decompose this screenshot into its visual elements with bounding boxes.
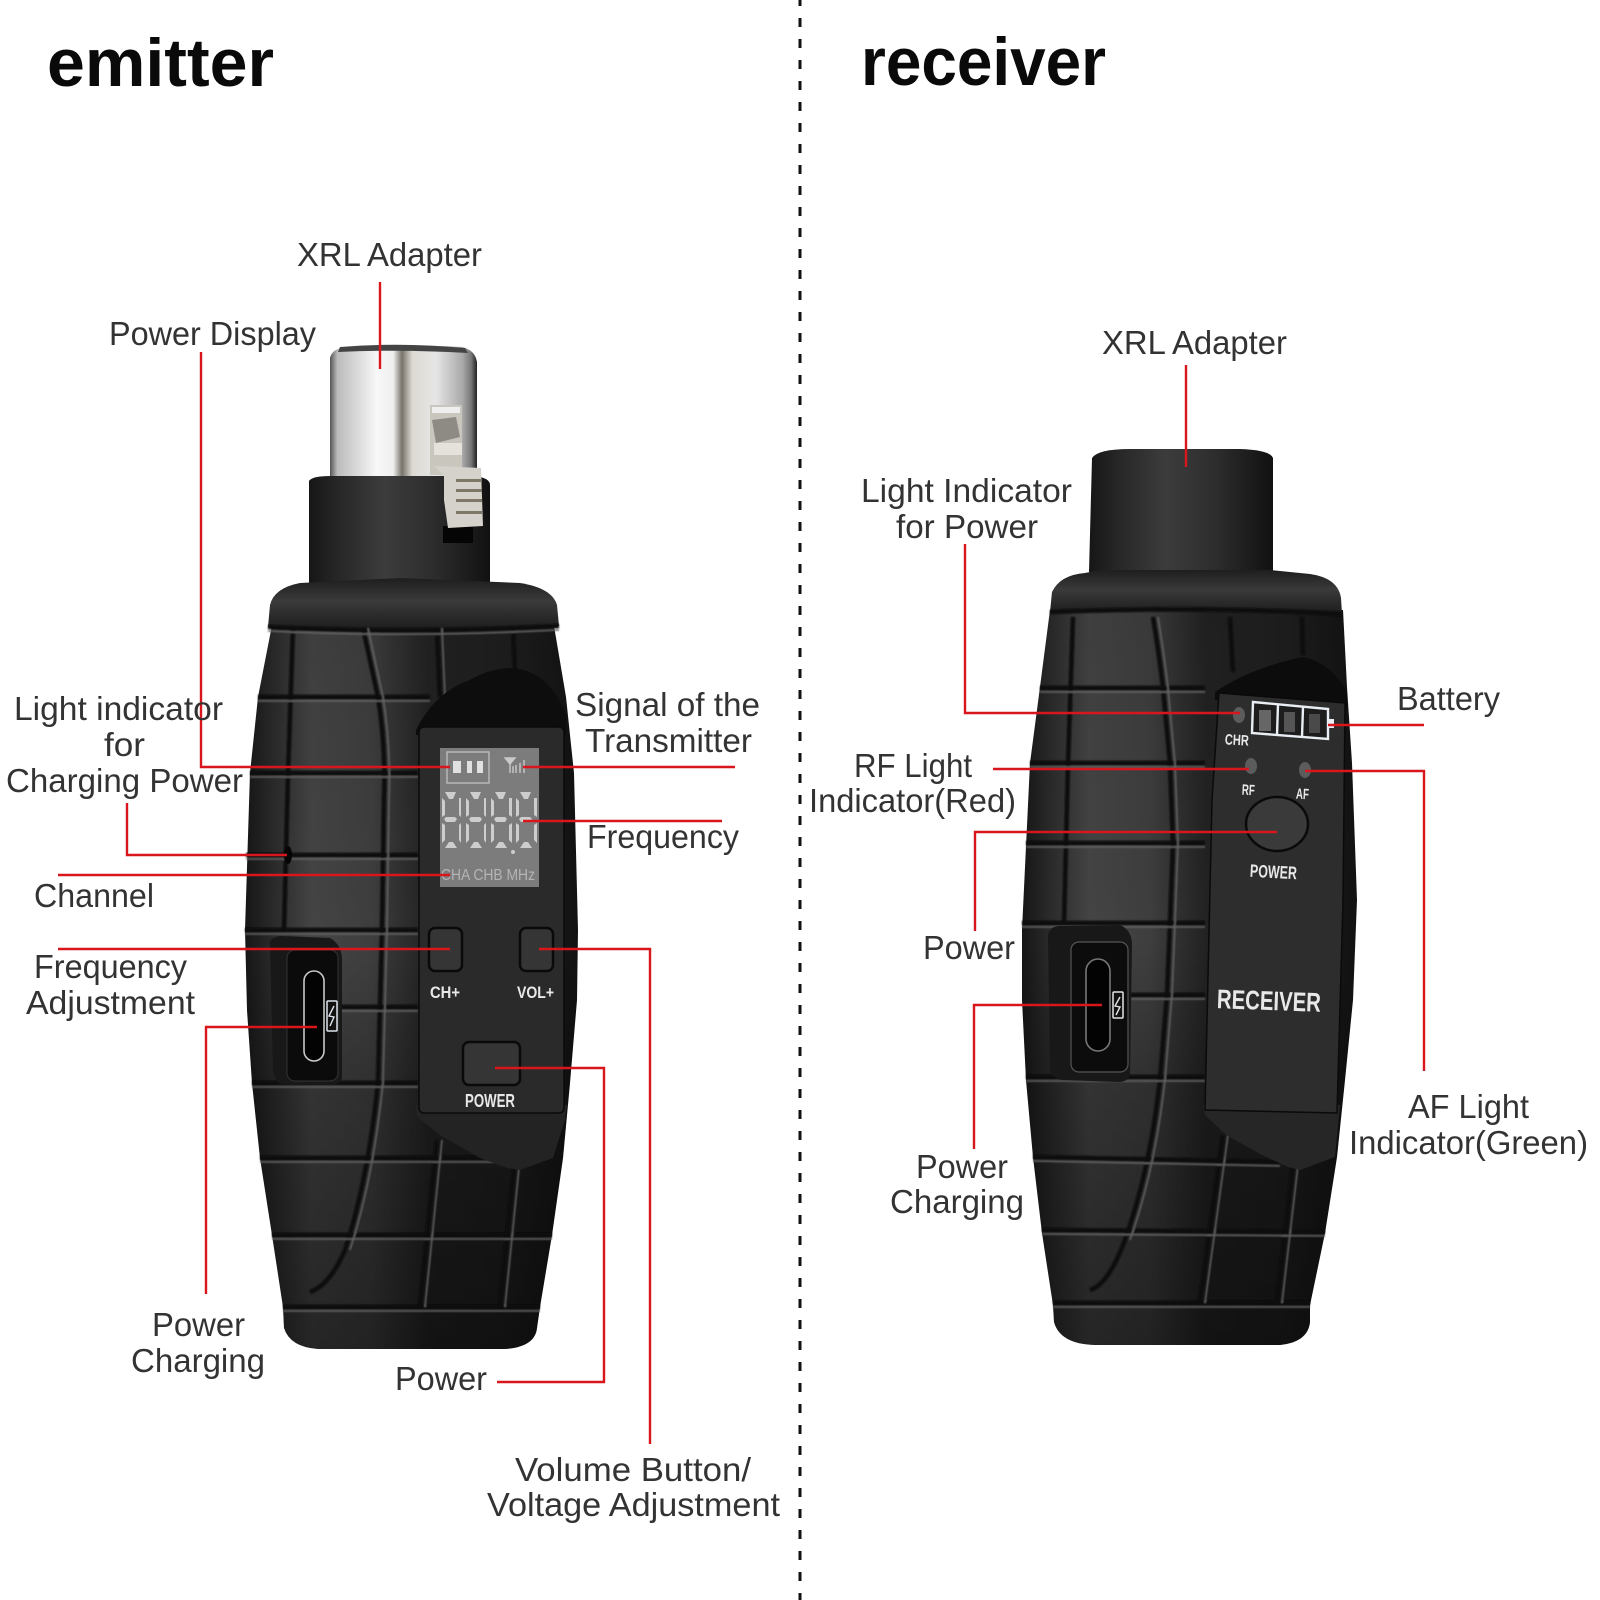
emitter callout: Frequency Adjustment: Adjustment: [26, 984, 195, 1021]
receiver callout: RF Light Indicator(Red): RF Light: [854, 747, 972, 784]
title: receiver: receiver: [861, 24, 1106, 100]
emitter callout: Signal of the Transmitter: Transmitter: [585, 722, 752, 759]
emitter callout: Light indicator for Charging Power: Light indicator: [14, 690, 223, 727]
label CHR: CHR: [1224, 731, 1249, 750]
receiver callout: XRL Adapter: XRL Adapter: [1102, 324, 1287, 361]
emitter callout: Signal of the Transmitter: [523, 686, 760, 767]
VOL+ button: [520, 928, 553, 971]
emitter callout: Power: Power: [395, 1360, 487, 1397]
receiver callout: Power: Power: [923, 929, 1015, 966]
receiver panel surround, lower: [1203, 1105, 1340, 1170]
receiver barrel: [1089, 449, 1273, 572]
battery bolt icon: [327, 1001, 337, 1031]
emitter callout: Volume Button / Voltage Adjustment: [487, 949, 780, 1523]
label AF: AF: [1295, 786, 1309, 803]
CHR LED: [1233, 707, 1245, 723]
lcd digit 3: [491, 792, 512, 848]
emitter callout: Power Charging: Charging: [131, 1342, 265, 1379]
latch slider: [434, 466, 483, 528]
lcd digit 1: [442, 792, 461, 848]
receiver callout: Light Indicator for Power: Light Indicator: [861, 472, 1072, 509]
title: emitter: emitter: [47, 25, 274, 101]
lcd decimal point: [511, 850, 515, 854]
emitter callout: Power Display: Power Display: [109, 315, 316, 352]
receiver callout: RF Light Indicator(Red): [809, 747, 1249, 819]
USB-C recess: [1048, 925, 1132, 1082]
grip grooves: [245, 626, 559, 1311]
emitter callout: Frequency: Frequency: [587, 818, 739, 855]
top cap: [268, 578, 559, 630]
receiver device photo: [1022, 449, 1357, 1345]
USB-C plate: [1071, 942, 1128, 1072]
black collar: [309, 476, 490, 590]
AF LED: [1299, 762, 1311, 778]
label POWER: POWER: [465, 1091, 515, 1111]
emitter callout: Frequency Adjustment: [26, 948, 450, 1021]
lcd channel text: CHA CHB MHz: [441, 867, 535, 884]
receiver callout: Battery: Battery: [1397, 680, 1500, 717]
battery bolt icon: [1113, 992, 1123, 1018]
panel surround, upper: [416, 668, 566, 735]
receiver callout: AF Light Indicator(Green): Indicator(Green): [1349, 1124, 1588, 1161]
receiver callout: Light Indicator for Power: [861, 472, 1240, 713]
emitter callout: Volume Button / Voltage Adjustment: Voltage Adjustment: [487, 1486, 780, 1523]
panel surround, lower: [415, 1105, 567, 1170]
USB-C port: [1086, 959, 1110, 1051]
CH+ button: [429, 928, 462, 971]
battery indicator icon: [1252, 702, 1334, 739]
RF LED: [1245, 758, 1257, 774]
receiver callout: Light Indicator for Power: for Power: [896, 508, 1038, 545]
emitter callout: Channel: Channel: [34, 877, 154, 914]
label VOL+: VOL+: [517, 983, 554, 1002]
label CH+: CH+: [430, 983, 460, 1002]
charging light pinhole: [284, 846, 292, 864]
label RF: RF: [1241, 782, 1255, 799]
emitter callout: Power Charging: Power: [152, 1306, 245, 1343]
receiver callout: Power Charging: Charging: [890, 1183, 1024, 1220]
control panel: [419, 727, 564, 1113]
centre dashed divider: [798, 0, 802, 1600]
latch slot: [443, 526, 473, 543]
emitter callout: Frequency Adjustment: Frequency: [34, 948, 187, 985]
emitter callout: Light indicator for Charging Power: for: [104, 726, 145, 763]
label POWER: POWER: [1249, 861, 1297, 883]
lcd signal icon: [505, 758, 524, 773]
receiver callout: AF Light Indicator(Green): AF Light: [1408, 1088, 1529, 1125]
round power button: [1246, 797, 1308, 851]
receiver control panel: [1205, 693, 1345, 1113]
emitter callout: Volume Button / Voltage Adjustment: Volume Button/: [515, 1451, 752, 1488]
USB-C plate: [287, 950, 338, 1081]
receiver main body: [1022, 610, 1357, 1345]
emitter callout: Light indicator for Charging Power: Charging Power: [6, 762, 243, 799]
label RECEIVER: RECEIVER: [1216, 984, 1321, 1018]
receiver callout: Power Charging: [890, 1005, 1102, 1220]
emitter callout: Light indicator for Charging Power: [6, 690, 287, 855]
lcd battery icon: [447, 752, 489, 783]
emitter device photo: [245, 345, 578, 1349]
USB-C port: [304, 971, 324, 1061]
main body: [245, 620, 578, 1349]
emitter callout: Signal of the Transmitter: Signal of the: [575, 686, 760, 723]
receiver callout: Power Charging: Power: [916, 1148, 1008, 1185]
POWER button: [463, 1042, 520, 1085]
lcd digit 4: [516, 792, 537, 848]
LCD screen: [440, 748, 539, 887]
receiver top cap: [1050, 570, 1342, 614]
emitter callout: Power Display: [109, 315, 450, 767]
emitter callout: XRL Adapter: XRL Adapter: [297, 236, 482, 273]
lcd digit 2: [466, 792, 486, 848]
USB-C port recess: [270, 936, 342, 1085]
receiver callout: AF Light Indicator(Green): [1305, 771, 1588, 1161]
receiver panel surround, upper: [1215, 657, 1347, 710]
emitter callout: Power: [395, 1068, 604, 1397]
receiver callout: RF Light Indicator(Red): Indicator(Red): [809, 782, 1016, 819]
emitter callout: Power Charging: [131, 1027, 317, 1379]
receiver callout: Power: [923, 832, 1277, 966]
receiver grip grooves: [1022, 609, 1342, 1307]
XLR metal connector: [330, 345, 477, 478]
